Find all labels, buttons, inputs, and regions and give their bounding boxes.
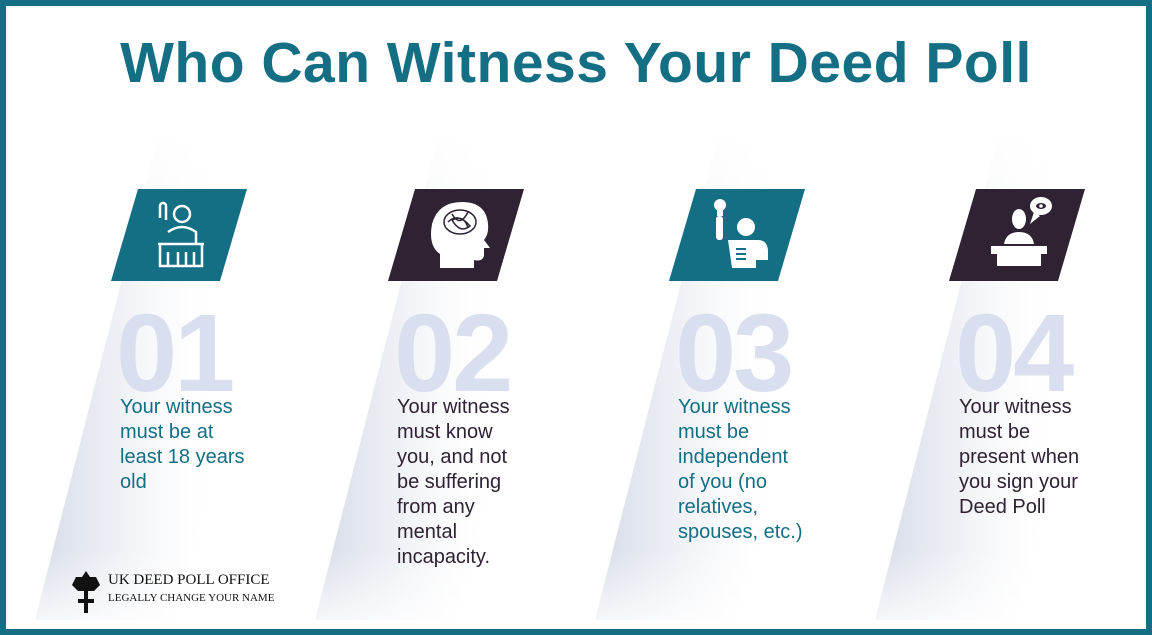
title: Who Can Witness Your Deed Poll [120, 31, 1032, 95]
icon: person with lightbulb [669, 189, 805, 281]
step 2 text: you, and not [397, 446, 507, 468]
step 4 text: you sign your [959, 471, 1078, 493]
step 1 text: must be at [120, 421, 213, 443]
step 1 text: old [120, 471, 147, 493]
step 2 text: be suffering [397, 471, 501, 493]
step 3 text: spouses, etc.) [678, 521, 803, 543]
step 4 text: present when [959, 446, 1079, 468]
step 4 number: 04 [955, 292, 1071, 415]
step 3 text: must be [678, 421, 749, 443]
step 4 text: Your witness [959, 396, 1072, 418]
step 4 text: must be [959, 421, 1030, 443]
step 4 text: Deed Poll [959, 496, 1046, 518]
icon: speaker at podium with eye bubble [949, 189, 1085, 281]
logo: UK DEED POLL OFFICE [108, 572, 270, 588]
logo: LEGALLY CHANGE YOUR NAME [108, 592, 274, 604]
step 2 text: from any [397, 496, 475, 518]
step 2 text: must know [397, 421, 493, 443]
step 4 text [959, 396, 1079, 518]
step 3 number: 03 [675, 292, 791, 415]
step 3 text [678, 396, 803, 543]
logo [72, 571, 274, 613]
step 2 text: mental [397, 521, 457, 543]
step 3 text: of you (no [678, 471, 767, 493]
step 3 text: Your witness [678, 396, 791, 418]
step 3 text: relatives, [678, 496, 758, 518]
step 1 text: least 18 years [120, 446, 245, 468]
step 2 text: Your witness [397, 396, 510, 418]
step 1 text: Your witness [120, 396, 233, 418]
step 2 text: incapacity. [397, 546, 490, 568]
step 2 number: 02 [394, 292, 510, 415]
icon: head with tangled brain [388, 189, 524, 281]
step 1 text [120, 396, 245, 493]
icon: person raising hand at desk [111, 189, 247, 281]
step 2 text [397, 396, 510, 568]
step 3 text: independent [678, 446, 788, 468]
step 1 number: 01 [116, 292, 232, 415]
